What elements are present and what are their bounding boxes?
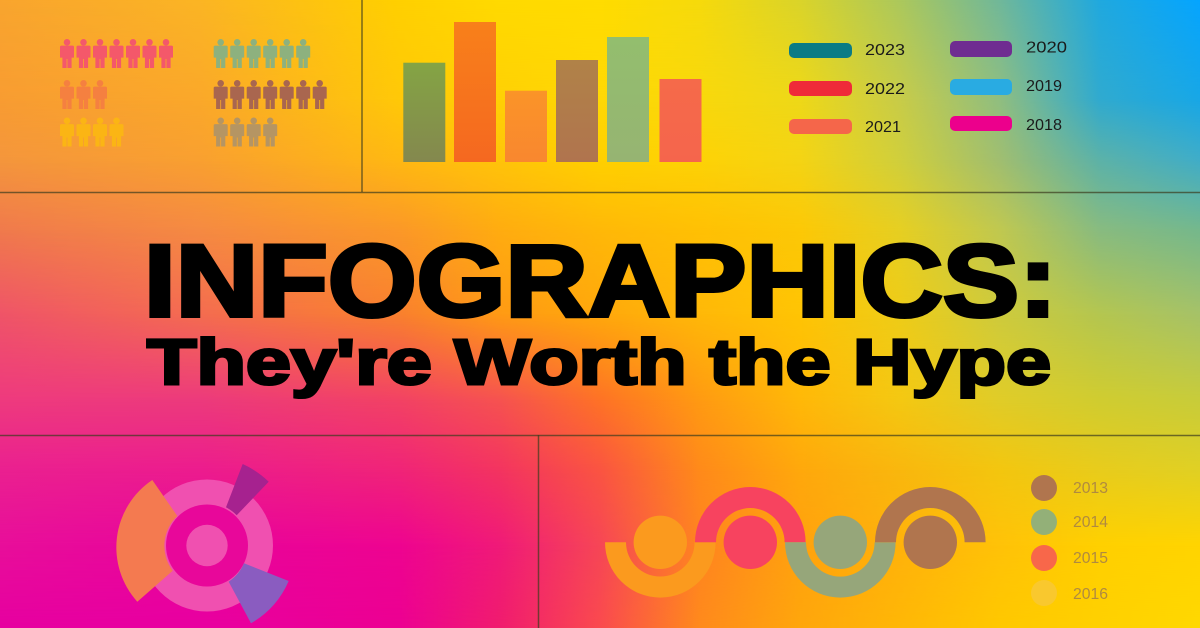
pictogram row: yellow, 4 people [60,118,124,146]
subheading: They're Worth the Hype [147,326,1051,398]
heading: INFOGRAPHICS: INFOGRAPHICS: [144,224,1057,338]
legend: years 2013 to 2016 [1031,475,1108,606]
pictogram row: tan, 4 people [214,118,277,146]
wave segment 2016 [875,487,986,569]
wedge: dark purple [226,464,269,515]
wave segment 2015 [785,516,896,598]
wedge: orange [116,480,177,602]
legend: years 2023 to 2018 [789,40,1067,136]
bar chart [403,22,702,162]
legend: years 2023 to 2018: 2021 [865,119,901,136]
legend: years 2013 to 2016: 2013 [1073,480,1108,497]
legend: years 2023 to 2018: 2019 [1026,78,1062,95]
legend: years 2013 to 2016: 2015 [1073,550,1108,567]
legend: years 2023 to 2018: 2018 [1026,117,1062,134]
pictogram row: red, 7 people [60,39,173,68]
legend: years 2023 to 2018: 2020 [1026,40,1067,56]
panel: radial donut chart [116,464,289,623]
pictogram row: orange, 3 people [60,80,107,109]
title [144,224,1057,398]
legend: years 2013 to 2016: 2016 [1073,586,1108,603]
panel: pictogram chart [60,39,327,146]
wedge: violet [229,563,289,623]
wave segment 2014 [695,487,806,569]
legend: years 2023 to 2018: 2023 [865,42,905,59]
legend: years 2023 to 2018: 2022 [865,81,905,98]
pictogram row: green, 6 people [214,39,310,68]
pictogram row: brown, 7 people [214,80,327,109]
wave segment 2013 [605,516,716,598]
legend: years 2013 to 2016: 2014 [1073,514,1108,531]
panel: wave timeline [605,487,986,598]
